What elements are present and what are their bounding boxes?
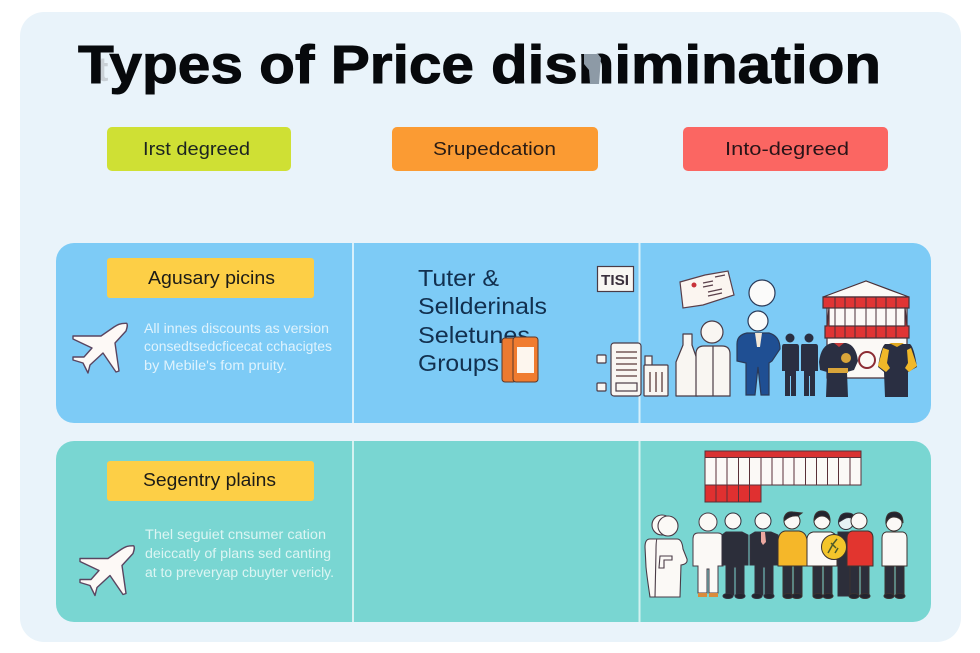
icon: ticket xyxy=(598,266,634,292)
person: dark suit two xyxy=(750,513,778,598)
people: two dark figures xyxy=(782,334,818,396)
text: segment list: Tuter & xyxy=(418,265,499,291)
title xyxy=(78,35,881,95)
icon: ring xyxy=(859,352,875,368)
icon: phones xyxy=(502,337,538,382)
icon: storefront xyxy=(823,281,909,378)
label: bottom row: Segentry plains xyxy=(143,470,276,490)
text: segment list: Seletunes xyxy=(418,322,530,348)
person: dark behind xyxy=(838,513,854,596)
text: top row description: All innes discounts as version xyxy=(144,321,329,336)
icon: gold coin xyxy=(822,534,846,560)
tab: second degree: Srupedcation xyxy=(433,138,556,159)
title: Types of Price xyxy=(78,35,474,95)
icon: box xyxy=(644,356,668,396)
tab: third degree: Into-degreed xyxy=(725,138,849,159)
person: yellow sleeves xyxy=(878,343,917,397)
text: segment list: Groups xyxy=(418,350,499,376)
person: red jacket xyxy=(847,513,873,598)
text: top row description: consedtsedcficecat cchacigtes xyxy=(144,339,332,354)
text: top row description: by Mebile's fom pruity. xyxy=(144,358,287,373)
person: yellow jacket xyxy=(778,512,807,598)
text: bottom row description xyxy=(145,527,334,580)
tab: first degree: Irst degreed xyxy=(143,138,250,159)
icon: bottle xyxy=(676,334,698,396)
tab: second degree xyxy=(392,127,598,171)
icon: airplane top xyxy=(73,323,127,373)
text: bottom row description: deiccatly of plans sed canting xyxy=(145,546,331,561)
person: white shirt right xyxy=(882,512,907,598)
chart: seat grid xyxy=(705,451,861,502)
person: white gown pair xyxy=(645,515,687,597)
text: segment list: Sellderinals xyxy=(418,293,547,319)
person: white shirt with coin xyxy=(807,511,837,598)
tab: first degree xyxy=(107,127,291,171)
title: disnimination xyxy=(491,35,881,95)
icon: airplane bottom xyxy=(80,546,134,596)
person: blue suit with speech bubble xyxy=(737,280,780,395)
text: top row description xyxy=(144,321,332,373)
text: bottom row description: Thel seguiet cnsumer cation xyxy=(145,527,326,542)
icon: ticket: TISI xyxy=(601,272,629,289)
label: bottom row xyxy=(107,461,314,501)
tab: third degree xyxy=(683,127,888,171)
panel: bottom row xyxy=(56,441,931,622)
person: dark shirt xyxy=(819,343,858,397)
person: white coat xyxy=(696,321,730,396)
title: t xyxy=(97,51,108,89)
panel: top row xyxy=(56,243,931,423)
label: top row: Agusary picins xyxy=(148,268,275,288)
person: white suit xyxy=(693,513,723,597)
person: dark suit one xyxy=(722,513,748,598)
text: segment list xyxy=(418,265,547,376)
label: top row xyxy=(107,258,314,298)
icon: document and plugs xyxy=(597,343,641,396)
text: bottom row description: at to preveryap cbuyter vericly. xyxy=(145,565,334,580)
icon: coupon cards xyxy=(680,271,734,308)
